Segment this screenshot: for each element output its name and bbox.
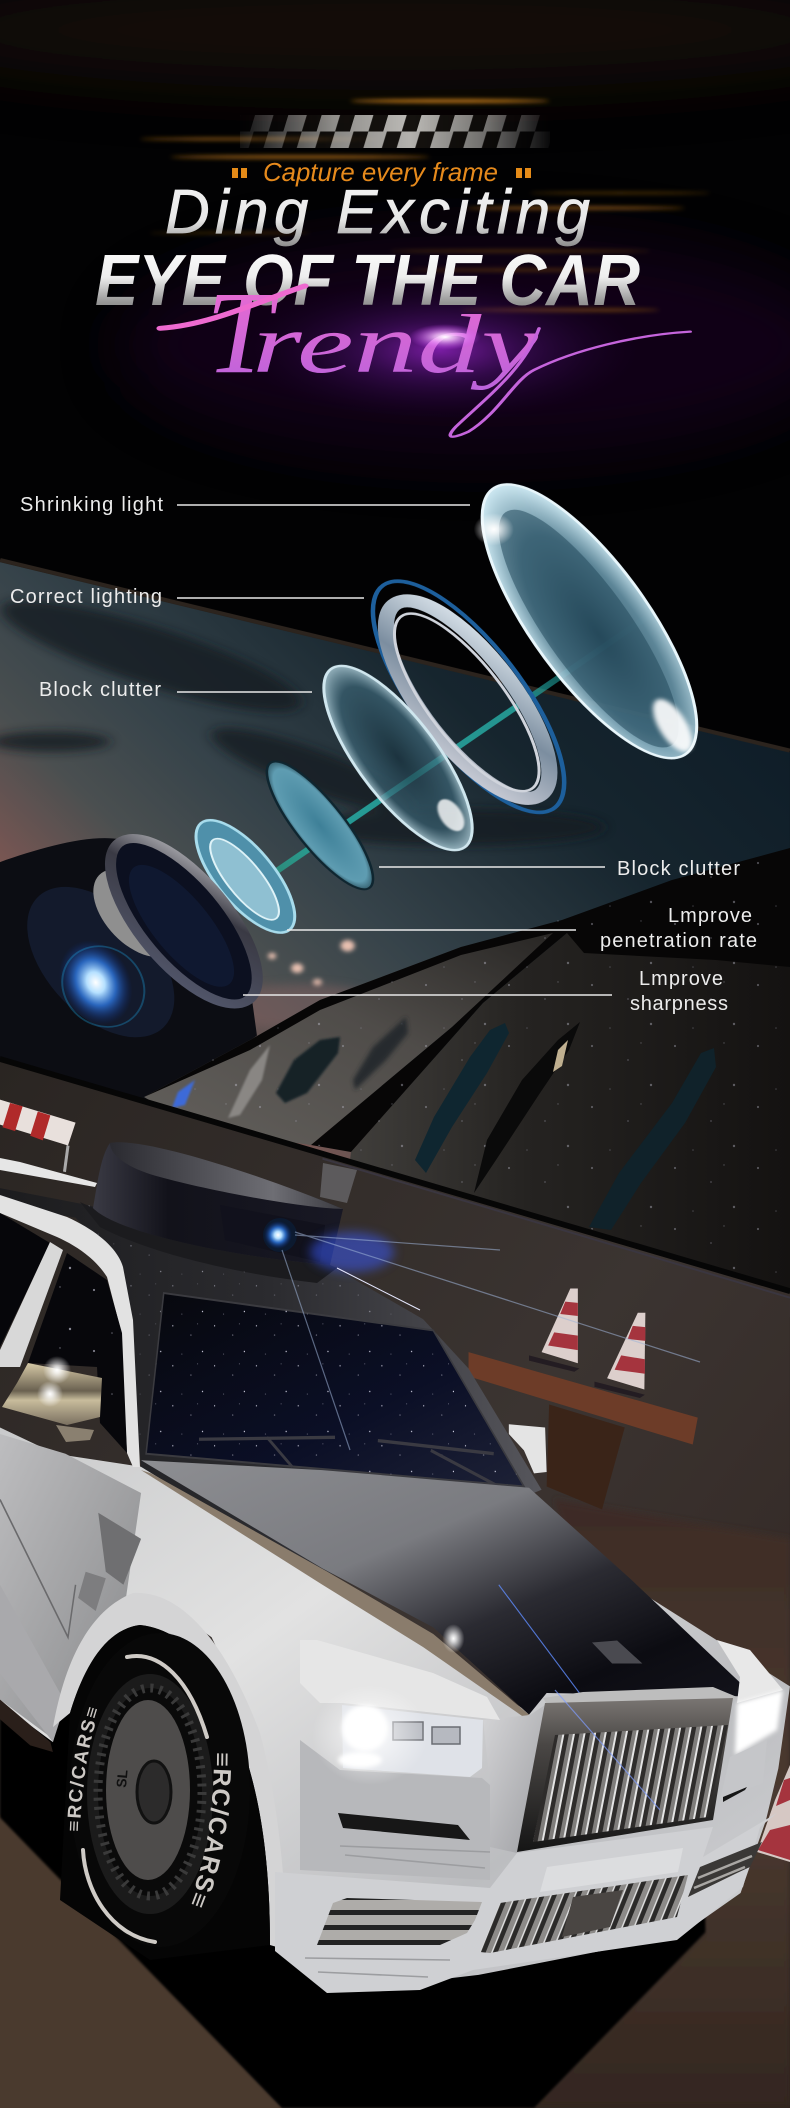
callout labels — [10, 494, 757, 1015]
windscreen surface — [144, 848, 790, 1300]
label: block clutter left: Block clutter — [39, 679, 161, 701]
right fender — [717, 1640, 783, 1703]
traffic cone 1 — [529, 1288, 579, 1372]
car front details — [275, 1640, 790, 1993]
ridge highlight — [322, 1159, 790, 1298]
bumper panel — [540, 1848, 683, 1892]
tire text left: ≡RC/CARS≡ — [68, 1707, 97, 1831]
camera cyan ring — [51, 939, 155, 1034]
grille blue streak — [555, 1690, 660, 1810]
reflection blob 1 — [276, 1037, 340, 1103]
camera light glow — [48, 934, 143, 1031]
ground shadow — [0, 1670, 705, 2108]
bench — [469, 1352, 698, 1509]
side window 2 — [28, 1253, 127, 1453]
roof specks — [86, 1205, 423, 1447]
main intake — [480, 1875, 688, 1953]
traffic cone 2 — [594, 1313, 645, 1398]
label: correct lighting: Correct lighting — [10, 586, 162, 608]
top warm haze — [0, 0, 790, 90]
white pillar — [0, 1195, 140, 1467]
hub mark: SL — [113, 1769, 131, 1788]
sensor lens — [263, 1218, 297, 1252]
specks — [144, 848, 790, 1290]
panel: lens diagram — [0, 462, 790, 1317]
right glass panel — [350, 933, 790, 1300]
fender tip — [300, 1640, 500, 1720]
roof edge — [0, 560, 790, 751]
reflection blob 3 — [415, 1023, 509, 1173]
light beams — [282, 1232, 700, 1450]
reflection blob 4 — [474, 1022, 580, 1193]
b pillar — [0, 1242, 63, 1367]
mirror housing — [0, 838, 257, 1178]
mirror stem — [56, 1425, 94, 1442]
car upper body details — [0, 1142, 700, 1467]
label: improve penetration rate: Lmprove — [668, 905, 752, 927]
beam — [191, 615, 650, 929]
label: improve penetration rate: penetration rate — [600, 930, 757, 952]
front face centre — [483, 1703, 548, 1853]
grille top trim — [543, 1687, 737, 1709]
label: block clutter right: Block clutter — [617, 858, 740, 880]
reflection blob 2 — [353, 1017, 408, 1090]
arch inner — [60, 1625, 270, 1960]
bumper — [275, 1813, 777, 1993]
orange light streaks — [140, 99, 710, 312]
hood trim — [141, 1470, 529, 1717]
checkered flag — [240, 115, 550, 148]
grille frame — [517, 1698, 733, 1852]
far mirror — [509, 1424, 547, 1473]
tire text right: ≡RC/CARS≡ — [192, 1753, 231, 1908]
intake plate — [562, 1890, 623, 1937]
script word: rendy — [252, 298, 539, 391]
front wheel — [53, 1596, 282, 1946]
label: improve sharpness — [243, 968, 728, 1015]
lower slit — [338, 1813, 470, 1840]
side window 1 — [0, 1213, 50, 1347]
wall and ground — [0, 1060, 790, 2108]
heading line one: Ding Exciting — [165, 178, 590, 247]
bumper ridges — [305, 1846, 490, 1977]
headlight halo — [312, 1685, 428, 1785]
windshield — [146, 1293, 524, 1486]
metal ring — [83, 821, 285, 1021]
floor lower left — [0, 1814, 282, 2108]
front face lower — [300, 1740, 490, 1880]
subtitle brackets — [232, 168, 531, 178]
left glass panel — [144, 930, 562, 1145]
highlight streak — [228, 1045, 270, 1118]
horizon lights — [268, 940, 355, 986]
ridge line — [0, 1059, 790, 1291]
sensor post — [320, 1163, 357, 1203]
mirror sparkle — [37, 1356, 71, 1407]
sensor beam glow — [310, 1232, 394, 1272]
label: shrinking light: Shrinking light — [20, 494, 163, 516]
side mirror — [2, 1363, 102, 1425]
side intake — [317, 1898, 482, 1945]
hub nut — [137, 1761, 171, 1823]
right vent — [688, 1842, 762, 1897]
wide purple tint — [120, 235, 790, 455]
sensor side — [93, 1143, 343, 1265]
blue spot — [172, 1080, 195, 1108]
sensor base — [80, 1202, 337, 1283]
script swashes — [160, 286, 690, 437]
cone at right edge — [757, 1765, 790, 1862]
lens 3 highlight — [432, 796, 470, 834]
blob 4 highlight — [553, 1040, 568, 1072]
wipers — [199, 1437, 499, 1486]
black hood edge — [144, 848, 790, 1152]
subtitle: Capture every frame — [263, 157, 498, 187]
panel: car scene — [0, 1059, 790, 2108]
night sky — [0, 562, 790, 1317]
right slit — [723, 1787, 747, 1802]
lens 3 — [297, 650, 499, 866]
headlight glow — [342, 1705, 388, 1751]
lens 1 highlight — [474, 513, 700, 756]
road glow — [217, 985, 388, 1029]
label: improve sharpness: Lmprove — [639, 968, 723, 990]
clouds — [0, 581, 605, 846]
purple glow — [240, 278, 640, 422]
reflection blob 5 — [589, 1048, 716, 1230]
floor right — [529, 1500, 790, 2108]
roof rail — [0, 1158, 97, 1187]
sill dark — [0, 1700, 53, 1752]
right lower panel — [720, 1740, 767, 1800]
label: improve penetration rate — [287, 905, 757, 952]
hub cap — [106, 1700, 190, 1880]
roof edge glint — [337, 1268, 420, 1310]
side window stars — [28, 1253, 127, 1453]
lens flare — [409, 324, 481, 350]
rim — [87, 1674, 213, 1914]
headlight bay — [342, 1705, 483, 1777]
lower sill — [0, 1585, 65, 1742]
headlight inner — [393, 1722, 460, 1744]
title block — [0, 0, 790, 455]
barrier — [0, 1100, 76, 1172]
hood — [141, 1460, 741, 1715]
car body — [0, 1427, 790, 1993]
lens 1 — [443, 462, 736, 780]
hood sparkle — [442, 1624, 465, 1653]
right headlight — [735, 1690, 783, 1755]
label: improve sharpness: sharpness — [630, 993, 728, 1015]
rim slots — [98, 1688, 202, 1896]
wheel arch lip — [53, 1593, 287, 1950]
lower light strip — [338, 1752, 382, 1768]
door vent — [78, 1513, 141, 1611]
door panel — [0, 1434, 141, 1739]
blue streak — [499, 1585, 665, 1808]
script word: T — [206, 267, 279, 398]
lens 5 — [178, 809, 313, 944]
heading line two: EYE OF THE CAR — [95, 241, 640, 321]
door line — [0, 1500, 76, 1637]
sensor top — [110, 1142, 343, 1209]
ring 2 — [338, 560, 599, 833]
thread barrel — [76, 857, 196, 969]
lens 4 — [250, 752, 390, 899]
sidewall arcs — [83, 1656, 207, 1942]
sensor module — [220, 1205, 325, 1262]
camera module — [0, 866, 205, 1058]
right vent highlights — [694, 1856, 752, 1888]
windshield stars — [146, 1293, 524, 1486]
tire — [70, 1633, 250, 1947]
roof — [0, 1188, 542, 1578]
hood vent — [592, 1641, 642, 1663]
grille slats — [533, 1725, 728, 1842]
